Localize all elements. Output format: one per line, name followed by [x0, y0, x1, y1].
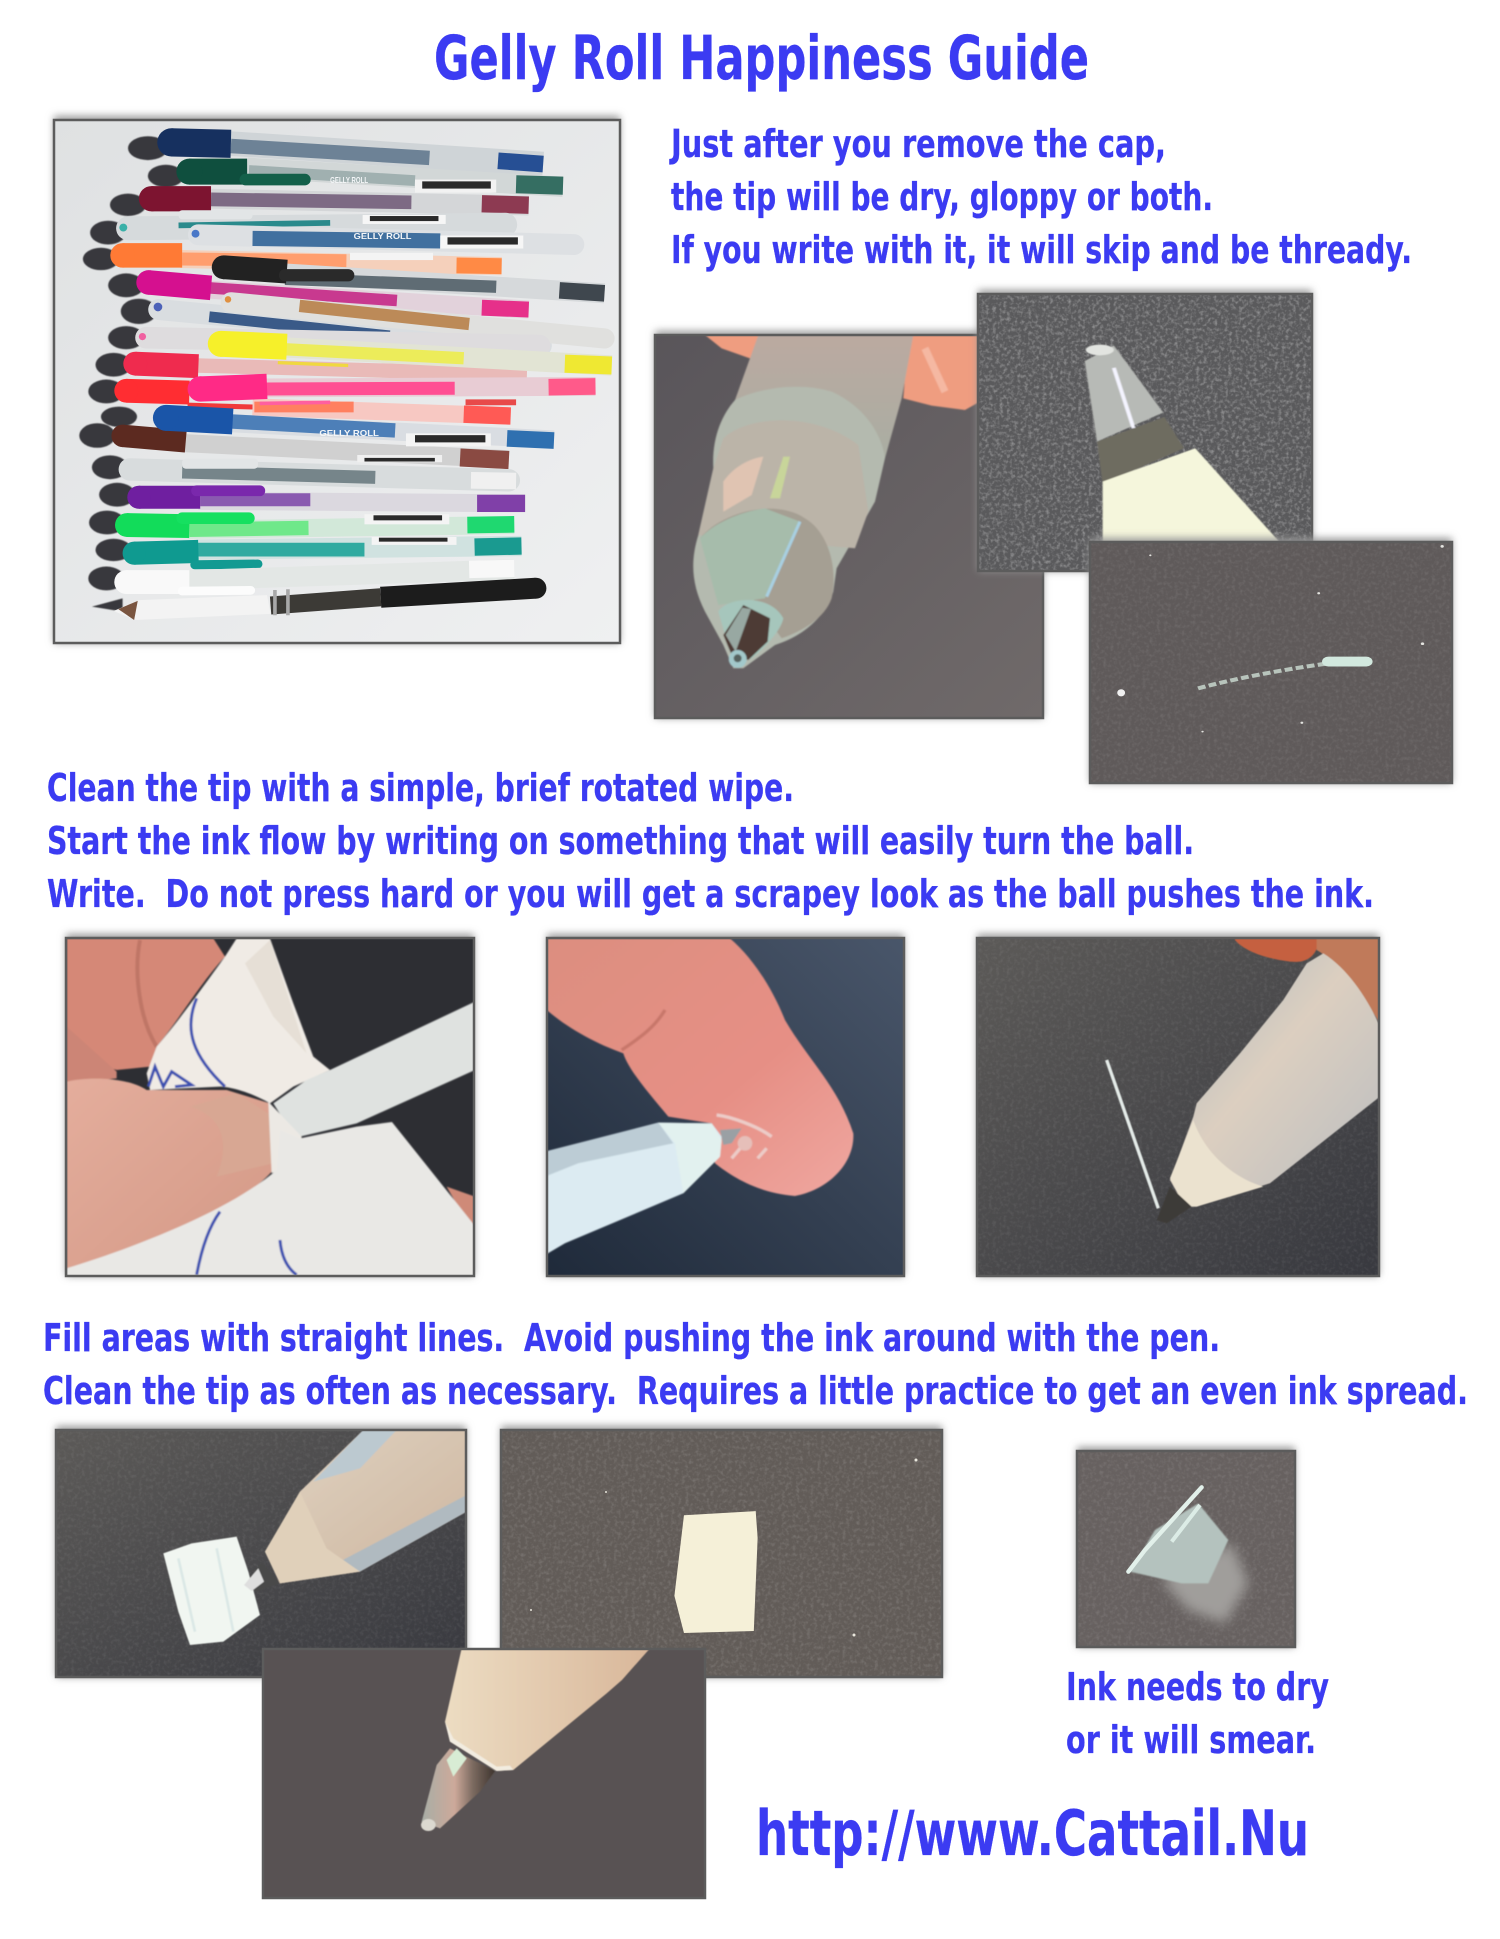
- pen 10 clear blue: [154, 303, 541, 346]
- pen 5 clear blue: [192, 230, 574, 249]
- pen 7 black glitter: [212, 255, 605, 293]
- pen 23 white: [114, 568, 514, 594]
- photo: wiping pen tip with tissue: [66, 934, 475, 1277]
- photo: skipping thready ink line: [1090, 538, 1452, 783]
- pen 16 coral: [253, 402, 516, 416]
- pen 21 green: [115, 513, 514, 537]
- photo: gloppy tip on black paper: [978, 290, 1312, 571]
- photo: assortment of gel pens: [54, 116, 620, 643]
- pen 2 green glitter: [176, 159, 563, 193]
- pen 17 blue: GELLY ROLL: [319, 428, 380, 438]
- pen 4 clear teal: [119, 210, 505, 232]
- photo: smeared ink: [1077, 1447, 1295, 1647]
- pen 13 red-pink: [123, 352, 527, 376]
- pen 2 green glitter: GELLY ROLL: [330, 175, 369, 185]
- photo: filling an area with the pen: [56, 1426, 467, 1677]
- pen 5 clear blue: GELLY ROLL: [354, 231, 412, 241]
- caption: ink needs to dry: [1066, 1665, 1329, 1762]
- pen 14 red: [114, 379, 253, 407]
- pen 8 magenta: [136, 270, 529, 310]
- text block: clean the tip and start the flow: [47, 766, 1374, 916]
- caption: ink needs to dry: or it will smear.: [1066, 1718, 1316, 1762]
- text block: after removing the cap: [669, 122, 1412, 272]
- pen 1 navy glitter: [157, 128, 543, 164]
- photo: evenly filled white rectangle: [501, 1426, 942, 1677]
- photo: cleaned metal tip close-up: [263, 1648, 705, 1898]
- text block: clean the tip and start the flow: Clean the tip with a simple, brief rotated wipe.: [47, 766, 794, 810]
- photo: turning the ball on a fingertip: [545, 934, 904, 1276]
- pen 9 clear orange: [225, 296, 605, 338]
- title: Gelly Roll Happiness Guide: [434, 23, 1089, 94]
- photo: pen tip close-up: [655, 331, 1043, 718]
- pen 11 clear pink: [139, 333, 540, 346]
- text block: fill areas with straight lines: [43, 1316, 1468, 1413]
- website url: http://www.Cattail.Nu: [756, 1797, 1309, 1870]
- pen 17 blue: [153, 405, 554, 446]
- pen 22 teal: [123, 537, 521, 565]
- pen 20 purple: [127, 486, 525, 509]
- caption: ink needs to dry: Ink needs to dry: [1066, 1665, 1329, 1709]
- text block: after removing the cap: Just after you remove the cap,: [669, 122, 1166, 166]
- pen 19 clear grey: [130, 459, 516, 481]
- text block: after removing the cap: the tip will be dry, gloppy or both.: [671, 175, 1213, 219]
- pen 15 hot pink: [188, 376, 596, 403]
- pen 3 maroon: [139, 186, 529, 211]
- pen 12 yellow: [208, 331, 612, 365]
- photo: writing a white line: [977, 934, 1380, 1276]
- black marker and white pencil: [114, 578, 546, 620]
- pen 6 orange: [110, 243, 502, 268]
- pen 18 brown glitter: [111, 425, 509, 462]
